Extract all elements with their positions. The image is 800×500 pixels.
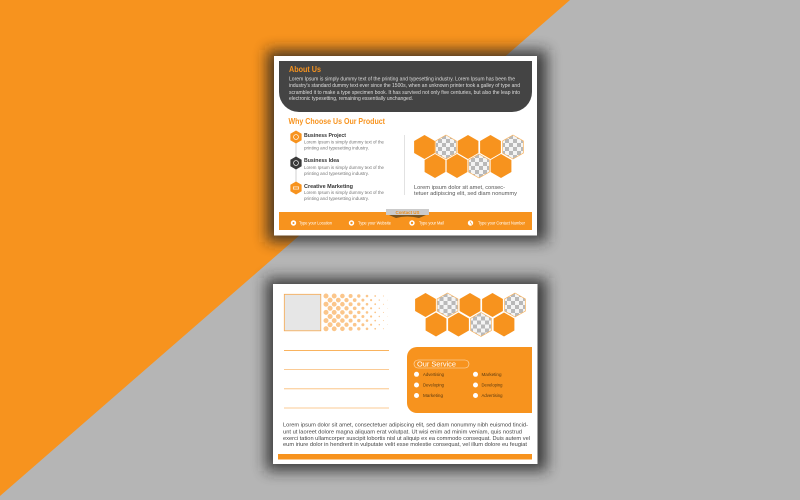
about us text: electronic typesetting, remaining essentially unchanged. — [289, 96, 413, 102]
feature: business project: Lorem Ipsum is simply dummy text of the — [304, 140, 384, 144]
body text: eum iriure dolor in hendrerit in vulputate velit esse molestie consequat, vel illum dolore eu feugiat — [283, 442, 527, 448]
brochure card: front page — [267, 50, 547, 242]
heading: our service: Our Service — [417, 360, 456, 368]
hexagon caption: tetuer adipiscing elit, sed diam nonummy — [414, 191, 517, 197]
service list left: Marketing — [423, 393, 443, 398]
feature: business idea: printing and typesetting industry. — [304, 171, 369, 176]
feature: business idea — [290, 157, 384, 176]
brochure card: back page — [266, 278, 547, 471]
feature: creative marketing: Creative Marketing — [304, 184, 353, 190]
blank lines — [284, 350, 389, 408]
heading: about us: About Us — [289, 65, 321, 74]
hexagon caption: Lorem ipsum dolor sit amet, consec- — [414, 185, 505, 191]
about us text — [289, 76, 520, 102]
body text: exerci tation ullamcorper suscipit lobortis nisl ut aliquip ex ea commodo consequat. Duis autem vel — [283, 436, 530, 442]
contact tab — [386, 209, 429, 218]
contact: mail — [409, 220, 444, 226]
body text: Lorem ipsum dolor sit amet, consectetuer adipiscing elit, sed diam nonummy nibh euismod tincid- — [283, 423, 528, 429]
contact tab: Contact US — [396, 210, 420, 216]
card sheet — [274, 56, 537, 236]
about us text: Lorem Ipsum is simply dummy text of the printing and typesetting industry. Lorem Ipsum has been the — [289, 76, 515, 82]
service list left — [414, 372, 444, 398]
feature: creative marketing — [290, 182, 384, 201]
contact: phone: Type your Contact Number — [478, 220, 526, 226]
service list right: Advertising — [482, 393, 503, 398]
about us text: scrambled it to make a type specimen book. It has survived not only five centuries, but also the leap into — [289, 90, 520, 96]
image placeholder — [284, 294, 321, 331]
panel: about us — [279, 61, 532, 112]
card sheet — [273, 284, 538, 464]
contact: location: Type your Location — [299, 220, 333, 226]
feature: business idea: Lorem Ipsum is simply dummy text of the — [304, 165, 384, 170]
halftone dots — [326, 296, 388, 331]
footer bar — [278, 454, 532, 460]
feature: business project: printing and typesetting industry. — [304, 146, 369, 150]
service list left: Developing — [423, 383, 444, 388]
hexagon caption — [414, 185, 517, 197]
icon: business idea — [290, 157, 302, 169]
panel: our service — [407, 347, 532, 413]
hexagon photo grid: front — [414, 135, 523, 178]
heading: why choose us: Why Choose Us Our Product — [288, 116, 385, 126]
service list right — [473, 372, 503, 398]
contact: mail: Type your Mail — [419, 220, 444, 226]
card shadow — [266, 278, 547, 471]
contact: website: Type your Website — [358, 220, 392, 226]
hexagon photo grid: back — [415, 293, 525, 336]
about us text: industry's standard dummy text ever since the 1500s, when an unknown printer took a galley of type and — [289, 83, 520, 89]
service list left: Advertising — [423, 372, 444, 377]
feature: creative marketing: printing and typesetting industry. — [304, 196, 369, 201]
service list right: Developing — [482, 383, 503, 388]
body text — [283, 423, 530, 448]
icon: creative marketing — [290, 182, 302, 194]
feature: creative marketing: Lorem Ipsum is simply dummy text of the — [304, 190, 384, 195]
body text: unt ut laoreet dolore magna aliquam erat volutpat. Ut wisi enim ad minim veniam, quis nostrud — [283, 429, 522, 435]
feature: business project: Business Project — [304, 133, 346, 139]
card shadow — [267, 50, 547, 242]
feature list — [290, 131, 384, 201]
feature: business idea: Business Idea — [304, 158, 340, 164]
service list right: Marketing — [482, 372, 502, 377]
contact bar — [279, 209, 532, 230]
feature: business project — [290, 131, 384, 150]
icon: business project — [290, 131, 302, 143]
